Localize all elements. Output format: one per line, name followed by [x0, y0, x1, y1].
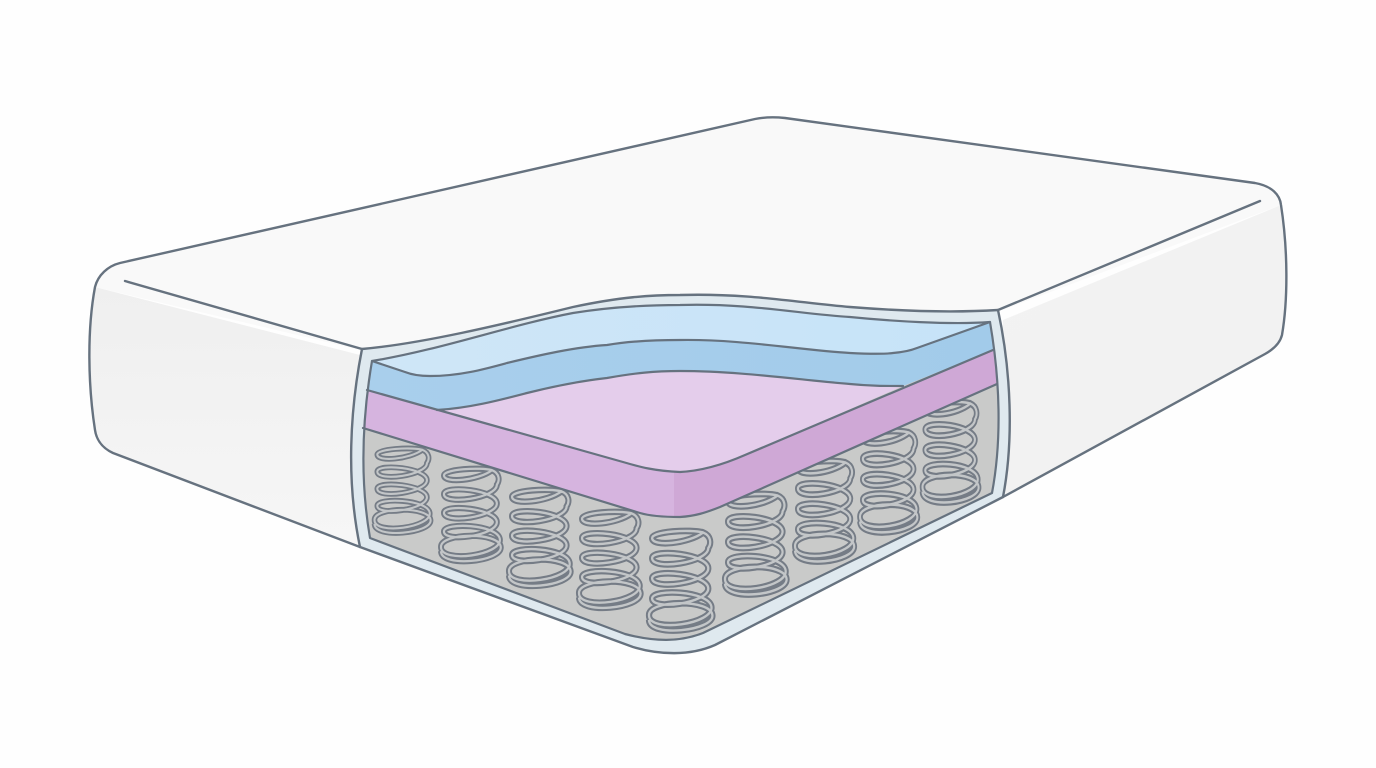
left side panel: [90, 287, 360, 548]
blue foam top surface: [372, 305, 990, 376]
purple foam side: [363, 350, 997, 517]
mattress outlines: [89, 117, 1286, 653]
mattress top surface: [95, 117, 1281, 350]
purple foam side shade: [674, 350, 997, 517]
cutaway outer edge: [351, 295, 1010, 547]
blue and purple boundary line: [367, 350, 993, 472]
cavity inner outline: [363, 305, 999, 640]
layer outlines: [363, 305, 999, 640]
spring 5: [649, 531, 712, 631]
right ridge line: [998, 201, 1260, 310]
spring 2: [441, 469, 501, 561]
spring cavity background: [363, 305, 999, 640]
spring 9: [922, 402, 979, 502]
blue lower curve: [437, 371, 903, 410]
purple lower line: [363, 384, 997, 517]
spring 8: [860, 431, 917, 532]
spring 7: [795, 461, 854, 561]
blue foam divider line: [372, 322, 990, 376]
spring 3: [509, 490, 571, 586]
right side panel: [1003, 205, 1286, 497]
illustration: mattress cutaway: [88, 116, 1288, 654]
springs: [374, 402, 979, 631]
blue foam side: [367, 322, 993, 410]
purple foam top surface: [437, 371, 903, 472]
outer silhouette: [89, 117, 1286, 653]
left ridge line: [125, 281, 362, 349]
spring 4: [579, 512, 641, 608]
spring 1: [374, 448, 431, 533]
cutaway frame band: [351, 295, 1010, 653]
spring 6: [725, 494, 787, 594]
